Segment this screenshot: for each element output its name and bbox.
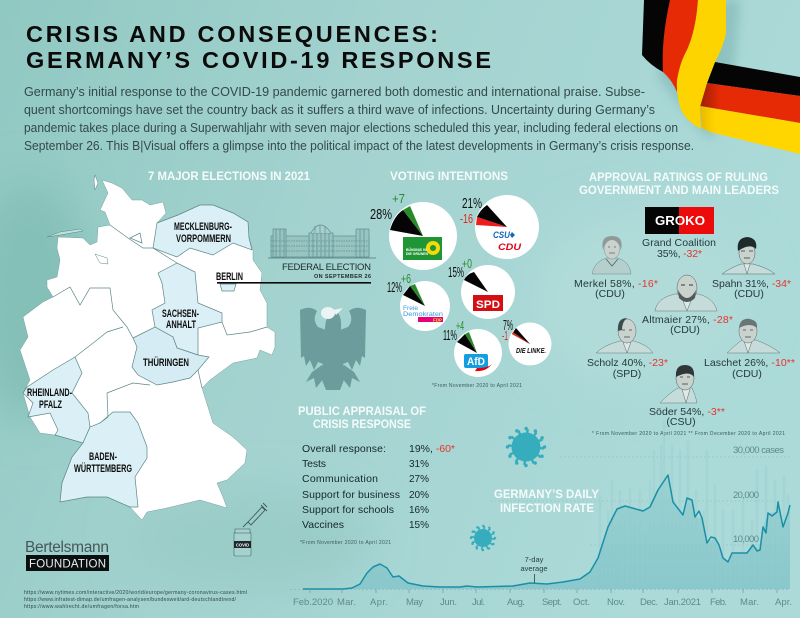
connector line to Berlin [217,282,371,284]
pie: SPD: 15% [448,264,464,281]
table: appraisal values: Tests [302,458,326,470]
icon: Reichstag [268,225,376,258]
title [26,21,491,73]
sources: https://www.wahlrecht.de/umfragen/forsa.htm [24,604,139,610]
pie: CDU/CSU: 21% [462,195,482,212]
logo: Bertelsmann Foundation: Bertelsmann [25,539,109,556]
pie: CDU/CSU [460,195,539,259]
panel: public appraisal [298,406,455,546]
map: Germany outline [20,180,275,520]
label: Baden-Württemberg: BADEN- [89,451,117,463]
pie: Greens: DIE GRÜNEN [406,252,428,256]
grid lines [290,457,790,590]
rating: Spahn: (CDU) [734,288,764,300]
table: appraisal values [302,443,455,531]
x axis labels: Sept. [542,597,562,608]
label: Baden-Württemberg: WÜRTTEMBERG [74,462,132,475]
pie: AfD [443,318,502,377]
area under curve [303,475,790,589]
label: Mecklenburg-Vorpommern: MECKLENBURG- [174,221,232,233]
x axis labels: Aug. [507,597,525,608]
x axis labels: Jan.2021 [664,597,701,608]
y axis labels: 20,000 [733,490,759,501]
heading: approval ratings [579,172,779,197]
region: Berlin [220,284,236,291]
label: Rheinland-Pfalz: RHEINLAND- [27,387,72,399]
table: appraisal values: 27% [409,473,429,485]
sources: https://www.infratest-dimap.de/umfragen-analysen/bundesweit/ard-deutschlandtrend/ [24,597,237,603]
pie: CDU/CSU: CDU [498,242,522,252]
rating: Merkel: Merkel 58%, -16* [574,278,658,290]
portrait: Altmaier [655,275,717,311]
x axis labels: May [406,597,423,608]
pie: FDP: Freie [403,306,419,312]
intro paragraph: Germany’s initial response to the COVID-19 pandemic garnered both domestic and international praise. Subse- [24,84,645,99]
rating: Merkel: (CDU) [595,288,625,300]
table: appraisal values: 16% [409,504,429,516]
pie: FDP: 12% [387,279,402,296]
panel: approval ratings [574,172,795,437]
label: Sachsen-Anhalt: SACHSEN- [162,308,199,320]
heading: public appraisal: CRISIS RESPONSE [313,419,411,431]
pie: AfD: +4 [456,318,464,333]
pie: Die Linke: -1 [502,328,508,343]
icon: large virus [508,428,544,466]
table: appraisal values: Support for business [302,489,400,501]
pie: AfD: AfD [467,356,485,368]
icon: vaccine and syringe [234,503,267,556]
heading: approval ratings: GOVERNMENT AND MAIN LEADERS [579,185,779,197]
x axis labels: Apr. [370,597,388,608]
rating: Merkel [574,278,658,300]
label: federal election [282,262,371,280]
rating: Altmaier: Altmaier 27%, -28* [642,314,733,326]
federal election callout [217,225,376,284]
region: Rheinland-Pfalz [23,357,90,443]
y axis labels: 10,000 [733,534,759,545]
heading: voting intentions: VOTING INTENTIONS [390,171,508,183]
lake and islands [47,175,108,264]
rating: Scholz [587,357,668,380]
footnote: appraisal: *From November 2020 to April 2021 [300,540,391,546]
portrait: Scholz [596,318,653,353]
x axis labels: Mar. [337,597,356,608]
pie: Die Linke: 7% [503,317,513,334]
heading: daily infection rate: INFECTION RATE [500,503,594,515]
x axis ticks [310,589,777,593]
icon: vaccine and syringe: COVID [236,542,249,548]
rating: Altmaier [642,314,733,336]
table: appraisal values: Support for schools [302,504,394,516]
y axis labels: 30,000 cases [733,445,784,456]
rating: Laschet [704,357,795,380]
label: Sachsen-Anhalt [162,308,199,331]
pie: Greens: 28% [370,206,392,223]
annotation: 7-day average [520,555,548,583]
rating: Söder [649,406,725,428]
intro paragraph: quent shortcomings have set the country back as it suffers a third wave of infections. Uncertainty during Germany’s [24,102,655,117]
pie: FDP [387,271,450,331]
icon: small virus [471,526,495,550]
heading: daily infection rate: GERMANY’S DAILY [494,489,599,501]
ribbon: German flag [642,0,800,154]
label: Mecklenburg-Vorpommern: VORPOMMERN [176,233,231,245]
portrait: Laschet [727,319,780,353]
label: Rheinland-Pfalz [27,387,72,411]
table: appraisal values: Overall response: [302,443,386,455]
label: Thüringen: THÜRINGEN [143,356,189,369]
sources: https://www.nytimes.com/interactive/2020/world/europe/germany-coronavirus-cases.html [24,590,247,596]
x axis labels [293,597,792,608]
x axis labels: Dec. [640,597,658,608]
heading: public appraisal [298,406,426,431]
label: federal election: FEDERAL ELECTION [282,262,371,273]
heading: daily infection rate [494,489,599,515]
portrait: Spahn [722,237,775,274]
region: Baden-Württemberg [60,412,147,507]
table: appraisal values: 19%, -60* [409,443,455,455]
pie: FDP: +6 [401,271,411,286]
x axis labels: Nov. [607,597,625,608]
panel: map of elections [20,171,311,520]
rating: Spahn: Spahn 31%, -34* [712,278,791,290]
label: federal election: ON SEPTEMBER 26 [314,274,371,280]
label: Berlin: BERLIN [216,271,243,283]
pie: Die Linke: DIE LINKE. [516,348,546,355]
y axis labels [733,445,784,545]
x axis labels: Oct. [573,597,590,608]
sources [24,590,247,610]
region: Sachsen-Anhalt [152,263,222,355]
table: appraisal values: 15% [409,519,429,531]
rating: Scholz: Scholz 40%, -23* [587,357,668,369]
pie: CDU/CSU: CSU [493,230,510,240]
x axis labels: Apr. [775,597,792,608]
label: Sachsen-Anhalt: ANHALT [166,319,196,331]
pie: SPD [448,256,515,319]
rating: Scholz: (SPD) [613,368,641,380]
x axis labels: Jun. [440,597,457,608]
x axis labels: Feb.2020 [293,597,333,608]
annotation: 7-day average: average [520,564,548,573]
pie: Greens [370,191,457,270]
table: appraisal values: 31% [409,458,429,470]
portrait: Merkel [592,236,631,274]
state borders [53,225,267,423]
pie: FDP: Demokraten [403,312,443,318]
rating: Söder: (CSU) [666,416,696,428]
rating: Laschet: (CDU) [732,368,762,380]
rating: Altmaier: (CDU) [670,324,700,336]
pie: SPD: SPD [476,299,500,311]
rating: Söder: Söder 54%, -3** [649,406,725,418]
region: Mecklenburg-Vorpommern [153,205,252,257]
pie: Die Linke [502,317,552,366]
rating: Grand Coalition [642,237,716,260]
annotation: 7-day average: 7-day [525,555,544,564]
icon: eagle with mask [300,307,366,390]
title: GERMANY’S COVID-19 RESPONSE [26,47,491,73]
x axis labels: Jul. [472,597,485,608]
footnote: approval: * From November 2020 to April 2021 ** From December 2020 to April 2021 [592,431,785,437]
daily case bars [600,420,788,589]
logo: Bertelsmann Foundation [25,539,109,571]
pie: Greens: +7 [392,191,405,206]
rating: Spahn [712,278,791,300]
heading: public appraisal: PUBLIC APPRAISAL OF [298,406,426,418]
table: appraisal values: 20% [409,489,429,501]
region: Thüringen [132,327,209,385]
heading: elections: 7 MAJOR ELECTIONS IN 2021 [148,171,311,183]
logo: Bertelsmann Foundation: FOUNDATION [29,558,106,570]
intro paragraph: September 26. This B|Visual offers a glimpse into the political impact of the latest developments in Germany’s crisis response. [24,138,694,153]
pie: SPD: +0 [462,256,472,271]
chart: daily infection rate [290,420,792,608]
label: Baden-Württemberg [74,451,132,475]
badge: GroKo [645,207,714,234]
panel: voting intentions [370,171,552,389]
label: Mecklenburg-Vorpommern [174,221,232,245]
pie: CDU/CSU: -16 [460,211,473,226]
table: appraisal values: Communication [302,473,378,485]
label: Rheinland-Pfalz: PFALZ [39,399,62,411]
x axis labels: Mar. [740,597,759,608]
7-day average line [303,475,790,589]
pie: FDP: FDP [433,318,442,322]
title: CRISIS AND CONSEQUENCES: [26,21,438,47]
portrait: Söder [660,365,697,403]
intro paragraph [24,84,694,153]
pie: Greens: BÜNDNIS 90 [406,248,427,252]
x axis labels: Feb. [710,597,727,608]
pie: AfD: 11% [443,327,457,344]
heading: approval ratings: APPROVAL RATINGS OF RULING [589,172,768,184]
badge: GroKo: GROKO [655,213,705,228]
rating: Grand Coalition: Grand Coalition [642,237,716,249]
footnote: voting: *From November 2020 to April 2021 [432,383,522,389]
rating: Laschet: Laschet 26%, -10** [704,357,795,369]
table: appraisal values: Vaccines [302,519,344,531]
intro paragraph: pandemic takes place during a Superwahljahr with seven major elections scheduled this year, including federal elections on [24,120,678,135]
rating: Grand Coalition: 35%, -32* [657,248,702,260]
